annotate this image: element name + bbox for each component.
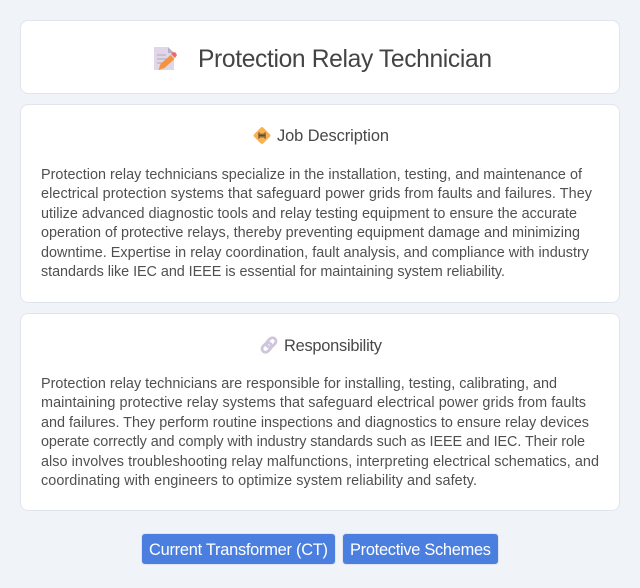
- panel: job description: [20, 104, 620, 303]
- job description text block: operation of protective relays, thereby preventing equipment damage and minimizing: [41, 225, 580, 241]
- responsibility text block: Protection relay technicians are responsible for installing, testing, calibrating, and: [41, 376, 557, 392]
- panel: responsibility: [20, 313, 620, 511]
- tag button: protective schemes: [343, 534, 498, 564]
- responsibility text block: also involves troubleshooting relay malfunctions, interpreting electrical schematics, and: [41, 454, 599, 470]
- icon: diamond road sign: [253, 126, 271, 145]
- job description text block: [41, 167, 593, 280]
- responsibility text block: coordinating with engineers to optimize system reliability and safety.: [41, 473, 477, 489]
- job description text block: utilize advanced diagnostic tools and relay testing equipment to ensure the accurate: [41, 206, 577, 222]
- tag button: current transformer: [142, 534, 335, 564]
- job description text block: electrical protection systems that safeguard power grids from faults and failures. They: [41, 186, 593, 202]
- responsibility text block: operate correctly and comply with industry standards such as IEEE and IEC. Their role: [41, 434, 585, 450]
- icon: document with pencil: [154, 47, 177, 70]
- panel: title card: [20, 20, 620, 94]
- job description text block: standards like IEC and IEEE is essential for maintaining system reliability.: [41, 264, 505, 280]
- job description text block: Protection relay technicians specialize in the installation, testing, and maintenance of: [41, 167, 583, 183]
- responsibility text block: and failures. They perform routine inspections and diagnostics to ensure relay devices: [41, 415, 589, 431]
- heading: job description: Job Description: [277, 127, 389, 145]
- tag button: current transformer: Current Transformer (CT): [149, 541, 328, 559]
- responsibility text block: [41, 376, 599, 489]
- heading: responsibility: Responsibility: [284, 337, 383, 355]
- responsibility text block: maintaining protective relay systems that safeguard electrical power grids from faults: [41, 395, 586, 411]
- icon: chain link: [261, 336, 277, 354]
- job description text block: downtime. Expertise in relay coordination, fault analysis, and compliance with industry: [41, 245, 590, 261]
- title: Protection Relay Technician: [198, 46, 492, 73]
- tag button: protective schemes: Protective Schemes: [350, 541, 491, 559]
